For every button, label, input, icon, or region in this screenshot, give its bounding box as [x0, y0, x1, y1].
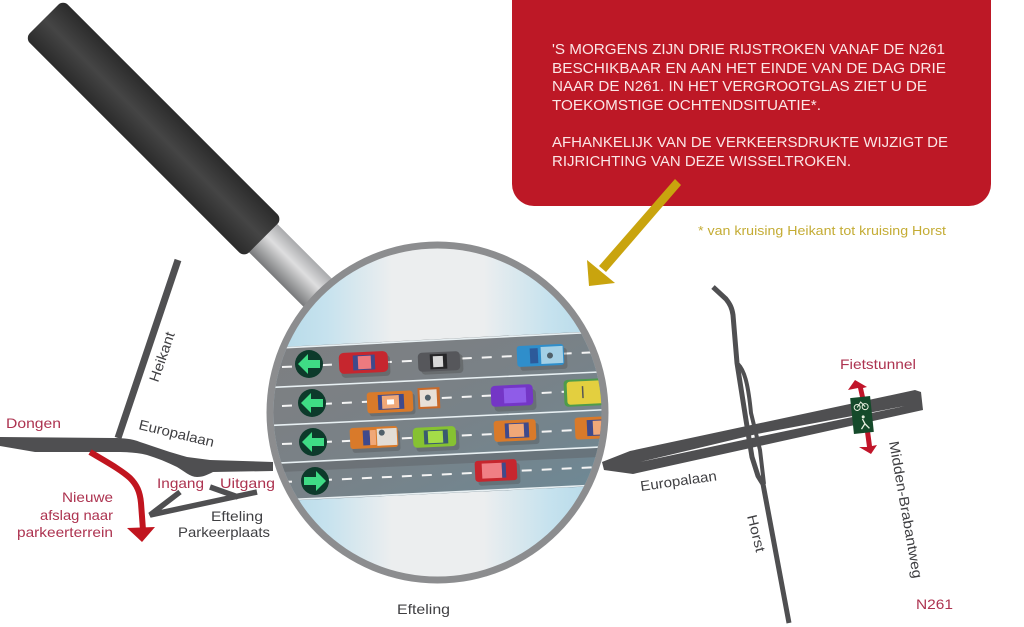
car: orange with trailer: [366, 387, 441, 417]
panel text: 'S MORGENS ZIJN DRIE RIJSTROKEN VANAF DE N261: [552, 41, 945, 58]
label: Heikant: Heikant: [146, 329, 178, 384]
car: orange with camper: [350, 426, 401, 453]
road: Europalaan west: [0, 437, 273, 477]
car: dark grey: [418, 351, 464, 375]
panel text: NAAR DE N261. IN HET VERGROOTGLAS ZIET U DE: [552, 78, 927, 95]
footnote: * van kruising Heikant tot kruising Horst: [698, 223, 946, 238]
road: Horst: [713, 287, 789, 623]
label: new exit: Nieuwe: [62, 489, 113, 505]
magnifying glass handle: [25, 0, 339, 314]
label: Europalaan east: Europalaan: [639, 467, 718, 494]
magnifying glass lens: [260, 242, 620, 584]
label: Dongen: Dongen: [6, 415, 61, 431]
panel text: TOEKOMSTIGE OCHTENDSITUATIE*.: [552, 97, 821, 114]
label: new exit: afslag naar: [40, 507, 113, 523]
traffic light: left arrow 1: [295, 350, 323, 378]
panel text: [552, 41, 948, 170]
road in lens: [274, 332, 602, 500]
panel text: RIJRICHTING VAN DEZE WISSELTROKEN.: [552, 153, 851, 170]
label: Efteling: Efteling: [397, 601, 450, 617]
info panel: [512, 0, 991, 206]
panel text: BESCHIKBAAR EN AAN HET EINDE VAN DE DAG DRIE: [552, 60, 946, 77]
labels: [6, 329, 953, 617]
label: Efteling Parkeerplaats: Efteling: [211, 508, 263, 524]
car: red lower lane: [475, 459, 521, 486]
road: parking access: [150, 487, 257, 515]
car: orange: [494, 419, 540, 446]
label: N261: N261: [916, 596, 953, 612]
label: Efteling Parkeerplaats: [178, 508, 270, 540]
arrow: to magnifying glass: [587, 179, 681, 286]
icon: bicycle tunnel sign: [848, 380, 877, 454]
label: Uitgang: Uitgang: [220, 475, 275, 491]
car: orange clipped: [574, 416, 602, 440]
car: green: [413, 426, 460, 452]
arrow: new exit: [90, 452, 155, 542]
label: Ingang: Ingang: [157, 475, 204, 491]
road: Heikant: [118, 260, 178, 438]
label: Horst: Horst: [744, 513, 769, 554]
label: new exit: parkeerterrein: [17, 524, 113, 540]
label: Midden-Brabantweg: Midden-Brabantweg: [886, 440, 926, 579]
label: Efteling Parkeerplaats: Parkeerplaats: [178, 524, 270, 540]
car: purple: [491, 384, 537, 412]
label: Europalaan west: Europalaan: [137, 416, 216, 450]
road: Europalaan east: [602, 390, 923, 474]
car: blue: [517, 344, 568, 371]
traffic light: left arrow 3: [299, 428, 327, 456]
car: red: [339, 351, 391, 378]
traffic light: right arrow: [301, 467, 329, 495]
panel text: AFHANKELIJK VAN DE VERKEERSDRUKTE WIJZIGT DE: [552, 134, 948, 151]
car: yellow: [563, 378, 605, 407]
label: new exit: [17, 489, 113, 540]
traffic light: left arrow 2: [298, 389, 326, 417]
label: Fietstunnel: Fietstunnel: [840, 356, 916, 372]
